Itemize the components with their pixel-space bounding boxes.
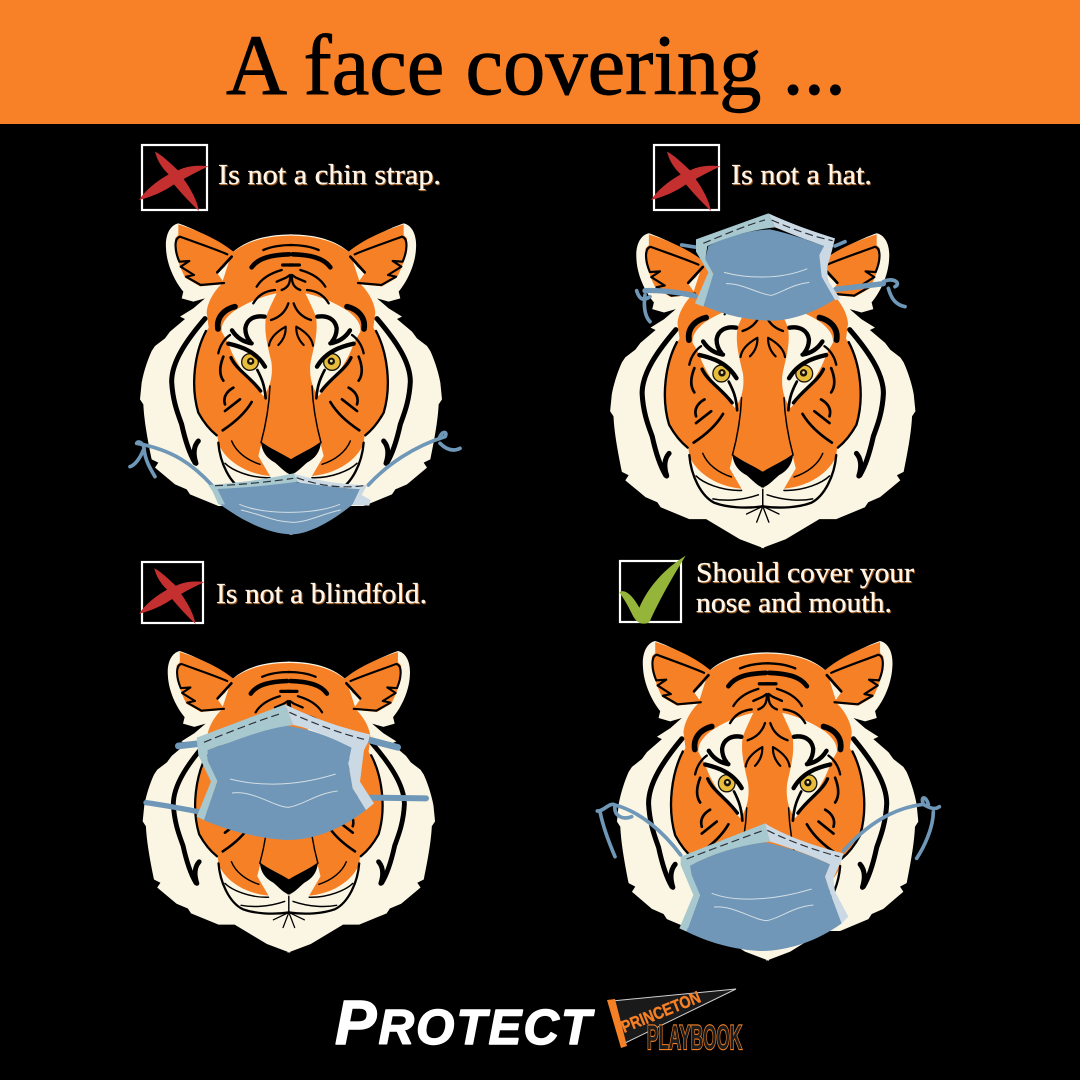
tiger wearing mask correctly: [597, 641, 939, 961]
label: hat: Is not a hat.: [731, 159, 872, 191]
label: blindfold: Is not a blindfold.: [216, 578, 427, 610]
icon: red cross checkbox: [139, 562, 204, 624]
title banner: [0, 0, 1080, 124]
panel: correct use: [597, 556, 939, 961]
icon: green check checkbox: [619, 556, 686, 624]
logo: Protect wordmark: PROTECT: [335, 989, 595, 1058]
icon: red cross checkbox: [651, 145, 720, 211]
panel: hat: [610, 145, 915, 548]
label: cover nose and mouth: Should cover your: [696, 557, 914, 589]
panel: chin strap: [130, 145, 460, 535]
label: cover nose and mouth: [696, 557, 914, 619]
tiger with mask on forehead: [610, 213, 915, 548]
icon: red cross checkbox: [139, 145, 208, 211]
logo: Princeton Playbook pennant: PRINCETON: [618, 988, 703, 1037]
tiger with mask over eyes: [143, 651, 435, 953]
label: cover nose and mouth: nose and mouth.: [696, 587, 892, 619]
panel: blindfold: [139, 562, 435, 953]
title: A face covering ...: [226, 17, 846, 113]
label: chin strap: Is not a chin strap.: [218, 159, 441, 191]
logo: Princeton Playbook pennant: [607, 988, 742, 1057]
tiger with mask on chin: [130, 223, 460, 535]
logo: Princeton Playbook pennant: PLAYBOOK: [647, 1019, 742, 1057]
